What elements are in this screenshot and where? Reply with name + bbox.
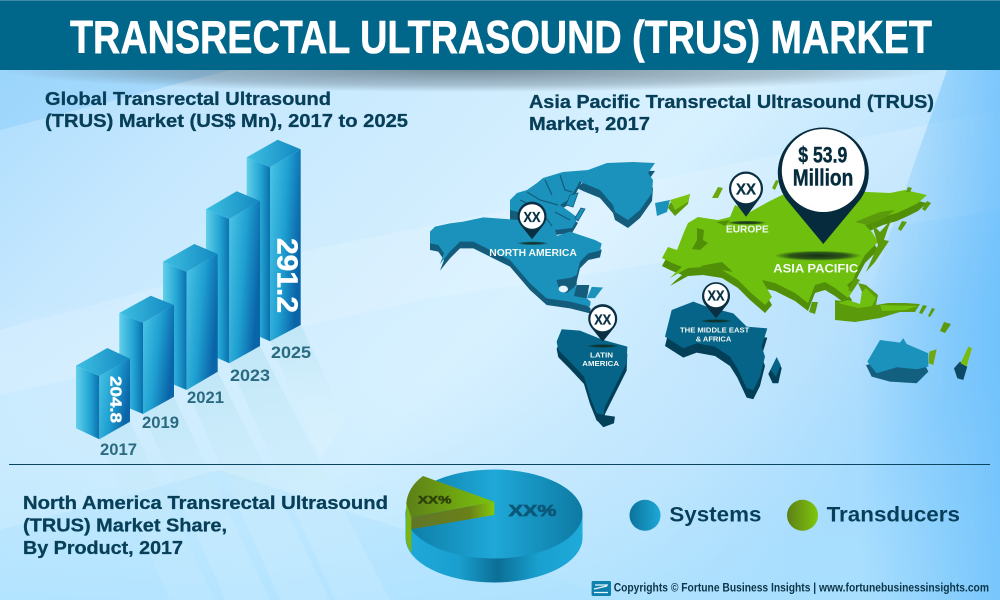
label: systems share: XX% — [509, 503, 556, 520]
year labels — [100, 344, 311, 459]
pin: asia pacific: Million — [793, 164, 853, 190]
region labels: LATIN — [590, 350, 613, 359]
pin: latin america: XX — [594, 312, 611, 328]
year labels: 2019 — [142, 414, 179, 432]
heading: global market: (TRUS) Market (US$ Mn), 2017 to 2025 — [45, 110, 408, 131]
pin: north america: XX — [524, 209, 540, 226]
value 204.8: 204.8 — [106, 376, 124, 423]
heading: north america share: By Product, 2017 — [23, 537, 183, 558]
pin: latin america — [588, 304, 617, 342]
pin: middle east and africa: XX — [708, 288, 724, 304]
region labels: THE MIDDLE EAST — [680, 326, 750, 335]
legend: systems — [630, 500, 761, 531]
world map — [430, 127, 972, 427]
legend: transducers: Transducers — [827, 503, 960, 527]
year labels: 2021 — [187, 389, 224, 407]
map: southeast asia — [809, 187, 951, 333]
heading: north america share: North America Transrectal Ultrasound — [23, 492, 388, 513]
pin: europe: XX — [736, 182, 756, 198]
map: greenland — [577, 162, 655, 228]
region labels — [489, 224, 859, 368]
heading: asia pacific — [529, 91, 934, 134]
value 291.2: 291.2 — [270, 238, 302, 313]
map: africa — [665, 302, 782, 399]
header shadow — [0, 48, 940, 92]
heading: asia pacific: Asia Pacific Transrectal Ultrasound (TRUS) — [529, 91, 934, 112]
map: arctic islands — [510, 170, 588, 255]
heading: north america share — [23, 492, 388, 558]
bar 2021 — [163, 244, 218, 390]
map: australia — [866, 338, 972, 383]
pie chart — [406, 470, 582, 582]
region labels: & AFRICA — [696, 335, 732, 344]
slice: transducers: XX% — [418, 494, 452, 506]
bar 2019 — [119, 296, 174, 414]
pin: europe — [729, 172, 763, 217]
region labels: EUROPE — [726, 224, 769, 236]
bar chart — [76, 140, 390, 600]
year labels: 2017 — [100, 441, 137, 459]
heading: asia pacific: Market, 2017 — [529, 113, 650, 134]
divider — [9, 464, 990, 466]
map: south america — [557, 329, 627, 427]
region labels: ASIA PACIFIC — [773, 261, 859, 275]
icon: logo — [592, 581, 611, 596]
title banner — [0, 0, 1000, 70]
pin: asia pacific — [778, 127, 869, 244]
pin shadow: asia pacific — [774, 251, 862, 261]
map: european seas — [692, 220, 733, 272]
year labels: 2025 — [271, 344, 311, 362]
legend: transducers — [787, 500, 960, 531]
map: eurasia — [662, 180, 951, 333]
map: north america — [430, 162, 690, 313]
bar 2025 — [247, 140, 301, 341]
heading: global market: Global Transrectal Ultrasound — [45, 88, 331, 109]
map: iceland — [655, 194, 690, 216]
region labels: AMERICA — [582, 359, 620, 368]
bar 2023 — [206, 191, 260, 363]
heading: global market — [45, 88, 408, 131]
slice: transducers — [406, 476, 494, 553]
pin: asia pacific: $ 53.9 — [798, 143, 847, 168]
heading: north america share: (TRUS) Market Share, — [23, 514, 227, 536]
pin: north america — [518, 202, 546, 239]
year labels: 2023 — [230, 367, 270, 385]
pin: middle east and africa — [702, 282, 730, 318]
pin shadows: regions — [517, 221, 767, 348]
map: japan and east coast — [866, 212, 895, 272]
legend: systems: Systems — [669, 503, 761, 527]
bar 2017 — [76, 348, 130, 439]
region labels: NORTH AMERICA — [489, 248, 577, 259]
